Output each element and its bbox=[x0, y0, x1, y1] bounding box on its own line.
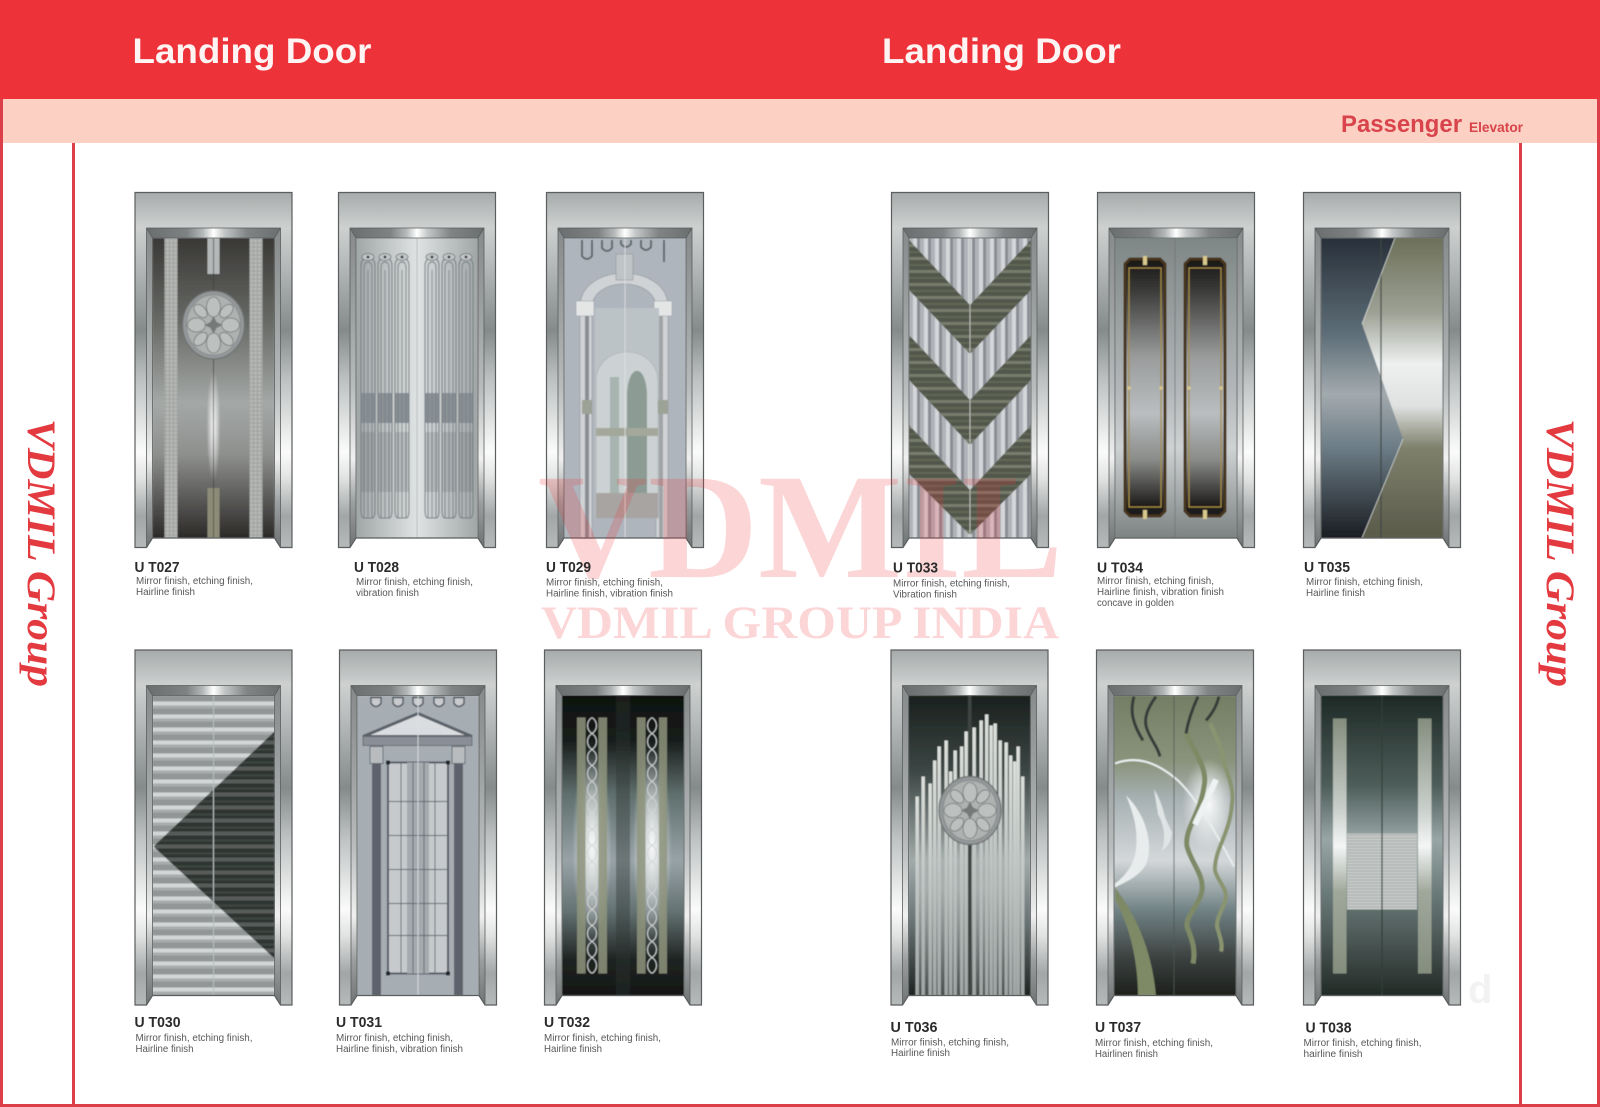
caption U T036: U T036 bbox=[890, 1019, 938, 1036]
caption U T030: Hairline finish bbox=[136, 1044, 194, 1055]
caption U T036: Mirror finish, etching finish, bbox=[891, 1038, 1009, 1048]
caption U T034 bbox=[1097, 560, 1224, 609]
door frame bbox=[546, 192, 704, 548]
caption U T029: Mirror finish, etching finish, bbox=[546, 578, 663, 588]
door U T031 bbox=[339, 650, 497, 1006]
caption U T031 bbox=[336, 1014, 463, 1055]
caption U T028 bbox=[354, 559, 473, 599]
door frame bbox=[134, 192, 292, 548]
watermark: VDMIL GROUP INDIA: VDMIL GROUP INDIA bbox=[541, 597, 1059, 649]
finish panel bbox=[357, 696, 479, 996]
caption U T037 bbox=[1095, 1019, 1213, 1060]
caption U T036: Hairline finish bbox=[891, 1048, 950, 1059]
finish panel bbox=[152, 238, 274, 538]
caption U T029: Hairline finish, vibration finish bbox=[546, 588, 673, 600]
caption U T035: Hairline finish bbox=[1306, 588, 1365, 599]
door U T033 bbox=[891, 192, 1049, 548]
door U T032 bbox=[544, 650, 702, 1006]
door U T034 bbox=[1097, 192, 1255, 548]
finish panel bbox=[356, 238, 478, 538]
caption U T028: U T028 bbox=[354, 559, 399, 576]
subtitle: Passenger Elevator: Elevator bbox=[1469, 120, 1524, 135]
caption U T030 bbox=[134, 1014, 252, 1055]
caption U T036 bbox=[890, 1019, 1009, 1059]
finish panel bbox=[908, 696, 1030, 996]
subtitle: Passenger Elevator bbox=[1341, 111, 1524, 138]
caption U T033 bbox=[893, 560, 1010, 600]
subtitle: Passenger Elevator: Passenger bbox=[1341, 111, 1462, 138]
door U T030 bbox=[134, 650, 292, 1006]
caption U T033: Vibration finish bbox=[893, 590, 957, 600]
caption U T035: Mirror finish, etching finish, bbox=[1306, 577, 1423, 588]
caption U T034: Hairline finish, vibration finish bbox=[1097, 587, 1224, 598]
door U T027 bbox=[134, 192, 292, 548]
caption U T029 bbox=[546, 559, 673, 600]
door frame bbox=[338, 192, 496, 548]
caption U T034: Mirror finish, etching finish, bbox=[1097, 576, 1214, 587]
door frame bbox=[544, 650, 702, 1006]
caption U T034: U T034 bbox=[1097, 560, 1144, 576]
finish panel bbox=[562, 696, 684, 996]
caption U T032: Hairline finish bbox=[544, 1044, 602, 1055]
caption U T037: U T037 bbox=[1095, 1019, 1141, 1036]
heading: Landing Door left: Landing Door bbox=[132, 32, 372, 71]
caption U T031: Mirror finish, etching finish, bbox=[336, 1033, 453, 1044]
finish panel bbox=[909, 238, 1031, 538]
caption U T033: U T033 bbox=[893, 560, 938, 576]
door frame bbox=[339, 650, 497, 1006]
caption U T038 bbox=[1304, 1020, 1422, 1060]
caption U T038: U T038 bbox=[1306, 1020, 1352, 1036]
finish panel bbox=[1321, 238, 1443, 538]
faint corner mark: d bbox=[1468, 968, 1492, 1012]
door frame bbox=[890, 650, 1048, 1006]
caption U T037: Hairlinen finish bbox=[1095, 1049, 1158, 1060]
door U T036 bbox=[890, 650, 1048, 1006]
caption U T027: Mirror finish, etching finish, bbox=[136, 576, 253, 587]
caption U T034: concave in golden bbox=[1097, 598, 1174, 609]
door U T035 bbox=[1303, 192, 1461, 548]
door frame bbox=[891, 192, 1049, 548]
door frame bbox=[1097, 192, 1255, 548]
finish panel bbox=[152, 696, 274, 996]
caption U T037: Mirror finish, etching finish, bbox=[1095, 1038, 1213, 1049]
caption U T031: U T031 bbox=[336, 1014, 382, 1031]
caption U T038: hairline finish bbox=[1304, 1049, 1362, 1060]
door frame bbox=[1096, 650, 1254, 1006]
door U T037 bbox=[1096, 650, 1254, 1006]
side label right: VDMIL Group: VDMIL Group bbox=[1538, 419, 1583, 687]
caption U T029: U T029 bbox=[546, 559, 591, 576]
caption U T035: U T035 bbox=[1304, 559, 1350, 576]
header banner bbox=[0, 0, 1600, 99]
door U T038 bbox=[1303, 650, 1461, 1006]
heading: Landing Door right: Landing Door bbox=[882, 32, 1121, 71]
door frame bbox=[1303, 650, 1461, 1006]
caption U T030: Mirror finish, etching finish, bbox=[136, 1033, 252, 1044]
caption U T033: Mirror finish, etching finish, bbox=[893, 578, 1010, 590]
caption U T035 bbox=[1304, 559, 1423, 599]
caption U T032 bbox=[544, 1014, 661, 1055]
door U T028 bbox=[338, 192, 496, 548]
caption U T032: U T032 bbox=[544, 1014, 590, 1031]
caption U T028: vibration finish bbox=[356, 588, 419, 599]
caption U T030: U T030 bbox=[134, 1014, 180, 1031]
caption U T027 bbox=[134, 559, 253, 598]
finish panel bbox=[564, 238, 686, 538]
door U T029 bbox=[546, 192, 704, 548]
sub-header band bbox=[3, 99, 1597, 143]
caption U T032: Mirror finish, etching finish, bbox=[544, 1033, 661, 1044]
door frame bbox=[134, 650, 292, 1006]
finish panel bbox=[1115, 238, 1237, 538]
caption U T027: Hairline finish bbox=[136, 587, 195, 598]
caption U T031: Hairline finish, vibration finish bbox=[336, 1044, 463, 1055]
caption U T038: Mirror finish, etching finish, bbox=[1304, 1038, 1422, 1049]
finish panel bbox=[1114, 696, 1236, 996]
finish panel bbox=[1321, 696, 1443, 996]
caption U T028: Mirror finish, etching finish, bbox=[356, 577, 473, 588]
door frame bbox=[1303, 192, 1461, 548]
caption U T027: U T027 bbox=[134, 559, 180, 576]
side label left: VDMIL Group: VDMIL Group bbox=[19, 419, 64, 687]
watermark: VDMIL: VDMIL bbox=[538, 444, 1063, 610]
